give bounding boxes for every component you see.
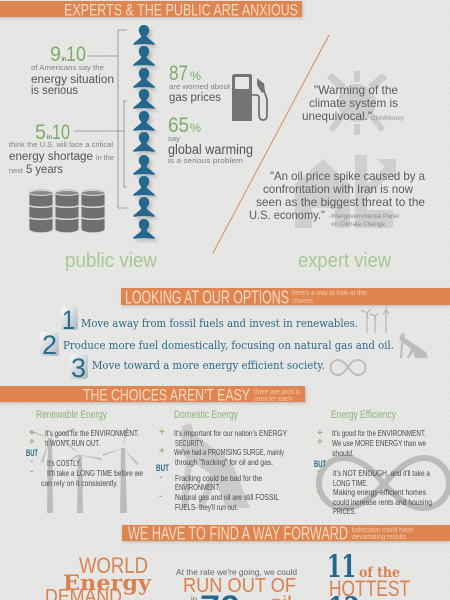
column: energy efficiency: BUT xyxy=(314,459,326,469)
column: energy efficiency: PRICES. xyxy=(333,506,356,516)
column: renewable energy: BUT xyxy=(26,448,38,458)
column: renewable energy: - xyxy=(30,456,33,467)
column: renewable energy: + xyxy=(29,428,35,439)
stat: 9 in 10 xyxy=(31,43,114,97)
icon: small infinity xyxy=(331,360,366,375)
section banner: looking at our options: here's a way to look at the xyxy=(292,288,366,297)
column: domestic energy: Domestic Energy xyxy=(174,409,238,421)
stat: 65 percent: say xyxy=(168,134,180,143)
stat: 5 in 10: next xyxy=(9,166,24,175)
column: renewable energy: - xyxy=(30,466,33,477)
people column: ten figures xyxy=(133,25,158,242)
quote: climate system: "Warming of the xyxy=(314,83,398,97)
column: renewable energy: It's good for the ENVIRONMENT. xyxy=(45,428,139,438)
quote: oil price spike xyxy=(249,169,425,228)
label: public view: public view xyxy=(65,250,158,272)
stat: 9 in 10: in xyxy=(62,57,66,63)
section banner: experts and the public are anxious xyxy=(0,0,303,20)
section banner: the choices aren't easy: cons for each xyxy=(254,394,292,403)
icon: oil barrels xyxy=(28,189,106,233)
column: domestic energy: - xyxy=(159,491,162,502)
column: domestic energy: ENVIRONMENT. xyxy=(175,482,220,492)
column: energy efficiency: should. xyxy=(332,448,354,458)
illustration: large wind turbines xyxy=(29,428,139,513)
column: energy efficiency: + xyxy=(317,437,323,448)
quote: oil price spike: "An oil price spike caused by a xyxy=(270,169,425,183)
bracket lines linking statistics to people xyxy=(74,30,127,208)
section banner: we have to find a way forward: indecision could have xyxy=(352,525,413,534)
stat: 5 in 10: energy shortage xyxy=(9,151,93,163)
option 2 xyxy=(40,330,394,360)
stat: 11 of the hottest: of the xyxy=(359,565,400,581)
illustration: large infinity xyxy=(319,458,449,508)
stat: 65 percent: global warming xyxy=(168,142,253,157)
option 2: 2 xyxy=(42,330,57,360)
quote: oil price spike: confrontation with Iran is now xyxy=(263,182,413,196)
section banner: looking at our options: LOOKING AT OUR OPTIONS xyxy=(125,288,289,308)
column: energy efficiency: Making energy-efficient homes xyxy=(333,487,426,497)
quote: oil price spike: on Climate Change xyxy=(331,221,385,228)
option 3: 3 xyxy=(71,353,86,383)
column: renewable energy: It WON'T RUN OUT. xyxy=(45,438,100,448)
stat: 5 in 10: 5 xyxy=(35,121,46,144)
stat: world energy demand xyxy=(45,553,152,600)
column: renewable energy xyxy=(26,409,143,488)
column: domestic energy: - xyxy=(159,472,162,483)
column: renewable energy: can rely on it consistently. xyxy=(41,478,118,488)
stat: 9 in 10: is serious xyxy=(31,85,78,97)
quote: oil price spike: -Intergovernmental Panel xyxy=(329,213,400,220)
stat: 5 in 10: in the xyxy=(96,153,114,162)
stat: 87 percent: are worried about xyxy=(169,82,231,91)
icon: gas pump xyxy=(232,74,267,121)
stat: run out of oil: At the rate we're going, we could xyxy=(176,567,297,577)
stat: 87 percent: gas prices xyxy=(169,92,221,104)
icon: small pumpjack xyxy=(399,333,428,358)
column: renewable energy: Renewable Energy xyxy=(36,409,107,421)
column: domestic energy: + xyxy=(159,427,165,438)
column: domestic energy: BUT xyxy=(156,463,169,473)
icon: faded house and rising arrow xyxy=(295,155,396,228)
illustration: large pumpjack xyxy=(181,423,250,508)
column: energy efficiency: - xyxy=(317,466,320,477)
stat: run out of oil: RUN OUT OF xyxy=(183,575,296,597)
section banner: experts and the public are anxious: EXPERTS & THE PUBLIC ARE ANXIOUS xyxy=(64,0,298,20)
label: expert view: expert view xyxy=(298,250,392,272)
stat: 87 percent: 87 xyxy=(169,62,188,85)
stat: 65 percent: is a serious problem xyxy=(168,156,243,165)
stat: 65 percent: 65 xyxy=(168,114,189,137)
stat: 65 percent xyxy=(168,114,253,165)
option 3 xyxy=(70,353,325,383)
quote: climate system: CNNMoney xyxy=(371,115,405,122)
stat: 5 in 10 xyxy=(9,121,114,176)
quote: climate system: climate system is xyxy=(309,96,398,110)
quote: climate system: unequivocal." xyxy=(302,109,372,123)
column: domestic energy: through "fracking" for oil and gas. xyxy=(175,457,273,467)
quote: oil price spike: U.S. economy." xyxy=(249,208,325,222)
stat: 11 of the hottest: 11 xyxy=(327,549,356,585)
stat: world energy demand: Energy xyxy=(63,570,152,595)
stat: 87 percent: % xyxy=(190,69,201,83)
column: domestic energy: FUELS- they'll run out. xyxy=(175,502,238,512)
stat: 5 in 10: 5 years xyxy=(26,162,63,176)
column: domestic energy: We've had a PROMISING SURGE, mainly xyxy=(174,447,285,457)
stat: run out of oil xyxy=(176,567,297,600)
column: domestic energy: Fracking could be bad for the xyxy=(175,473,262,483)
column: domestic energy: Natural gas and oil are still FOSSIL xyxy=(175,492,279,502)
quote: climate system xyxy=(302,83,405,123)
column: energy efficiency: LONG TIME. xyxy=(333,478,368,488)
stat: 5 in 10: think the U.S. will face a critical xyxy=(9,140,113,149)
option 1: 1 xyxy=(62,305,75,335)
section banner: we have to find a way forward: WE HAVE TO FIND A WAY FORWARD xyxy=(128,524,348,544)
stat: 9 in 10: of Americans say the xyxy=(31,63,104,72)
column: energy efficiency: - xyxy=(317,486,320,497)
icon: faded sun xyxy=(327,71,387,135)
option 3: Move toward a more energy efficient society. xyxy=(92,359,325,372)
stat: 9 in 10: 9 xyxy=(50,43,61,66)
column: energy efficiency xyxy=(314,409,432,516)
quote: oil price spike: seen as the biggest threat to the xyxy=(256,195,425,209)
section banner: the choices aren't easy: THE CHOICES AREN'T EASY xyxy=(83,386,250,404)
column: energy efficiency: Energy Efficiency xyxy=(331,409,396,421)
column: domestic energy: + xyxy=(159,446,165,457)
stat: 5 in 10: 10 xyxy=(52,121,70,144)
column: domestic energy: It's important for our nation's ENERGY xyxy=(174,428,287,438)
stat: world energy demand: WORLD xyxy=(79,553,148,578)
icon: small wind turbines xyxy=(361,305,389,333)
column: renewable energy: It'll take a LONG TIME before we xyxy=(47,468,143,478)
column: domestic energy: SECURITY. xyxy=(175,438,204,448)
column: energy efficiency: + xyxy=(317,428,323,439)
stat: 87 percent xyxy=(169,62,231,104)
option 1 xyxy=(61,305,358,335)
section banner: looking at our options: choices xyxy=(292,296,313,305)
stat: 5 in 10: in xyxy=(47,135,52,141)
stat: 9 in 10: energy situation xyxy=(31,74,114,86)
stat: 11 of the hottest xyxy=(327,549,410,600)
stat: 65 percent: % xyxy=(190,121,201,135)
option 2: Produce more fuel domestically, focusing on natural gas and oil. xyxy=(63,339,394,352)
section banner: the choices aren't easy: there are pros & xyxy=(254,387,300,396)
orange diagonal divider xyxy=(213,35,329,253)
section banner: we have to find a way forward: devastating results xyxy=(352,532,406,541)
stat: 9 in 10: 10 xyxy=(66,43,86,66)
column: renewable energy: It's COSTLY. xyxy=(47,458,81,468)
option 1: Move away from fossil fuels and invest in renewables. xyxy=(81,317,358,330)
column: domestic energy xyxy=(156,409,287,512)
column: renewable energy: + xyxy=(29,437,35,448)
